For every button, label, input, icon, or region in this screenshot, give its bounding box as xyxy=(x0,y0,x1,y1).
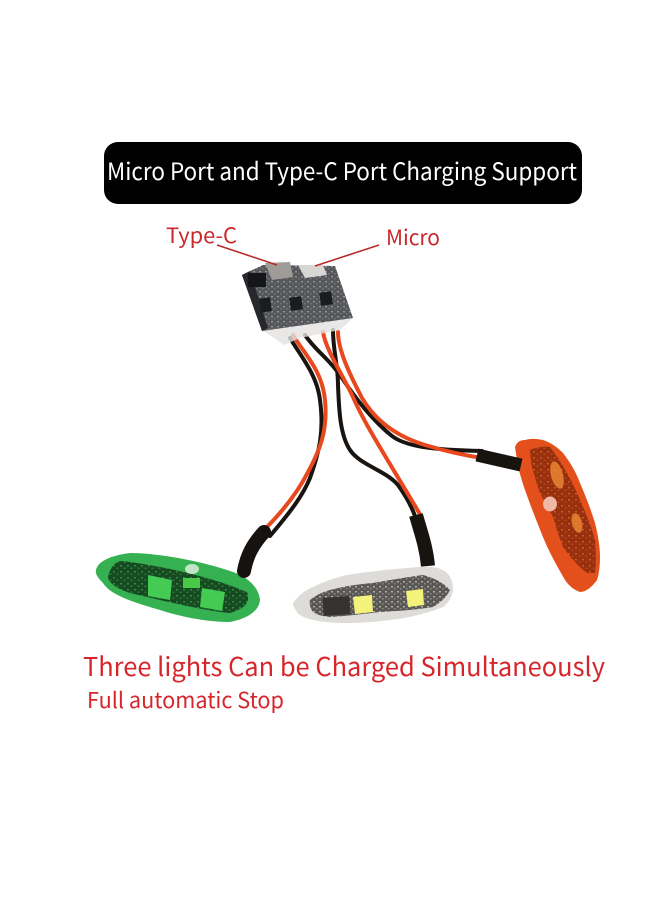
label: Micro: Micro xyxy=(386,222,440,252)
wires xyxy=(264,330,482,536)
white light xyxy=(293,515,453,623)
label: Micro xyxy=(315,222,440,266)
Type-C port xyxy=(265,262,293,280)
caption: automatic stop: Full automatic Stop xyxy=(87,683,284,715)
label: Type-C: Type-C xyxy=(166,220,237,250)
title banner: Micro Port and Type-C Port Charging Support xyxy=(107,152,577,187)
caption: three lights: Three lights Can be Charged Simultaneously xyxy=(83,647,605,684)
green light xyxy=(96,532,264,622)
charging board xyxy=(242,262,353,345)
title banner xyxy=(104,142,582,204)
label: Type-C xyxy=(166,220,277,265)
Micro port xyxy=(298,265,327,278)
orange light xyxy=(477,439,600,592)
